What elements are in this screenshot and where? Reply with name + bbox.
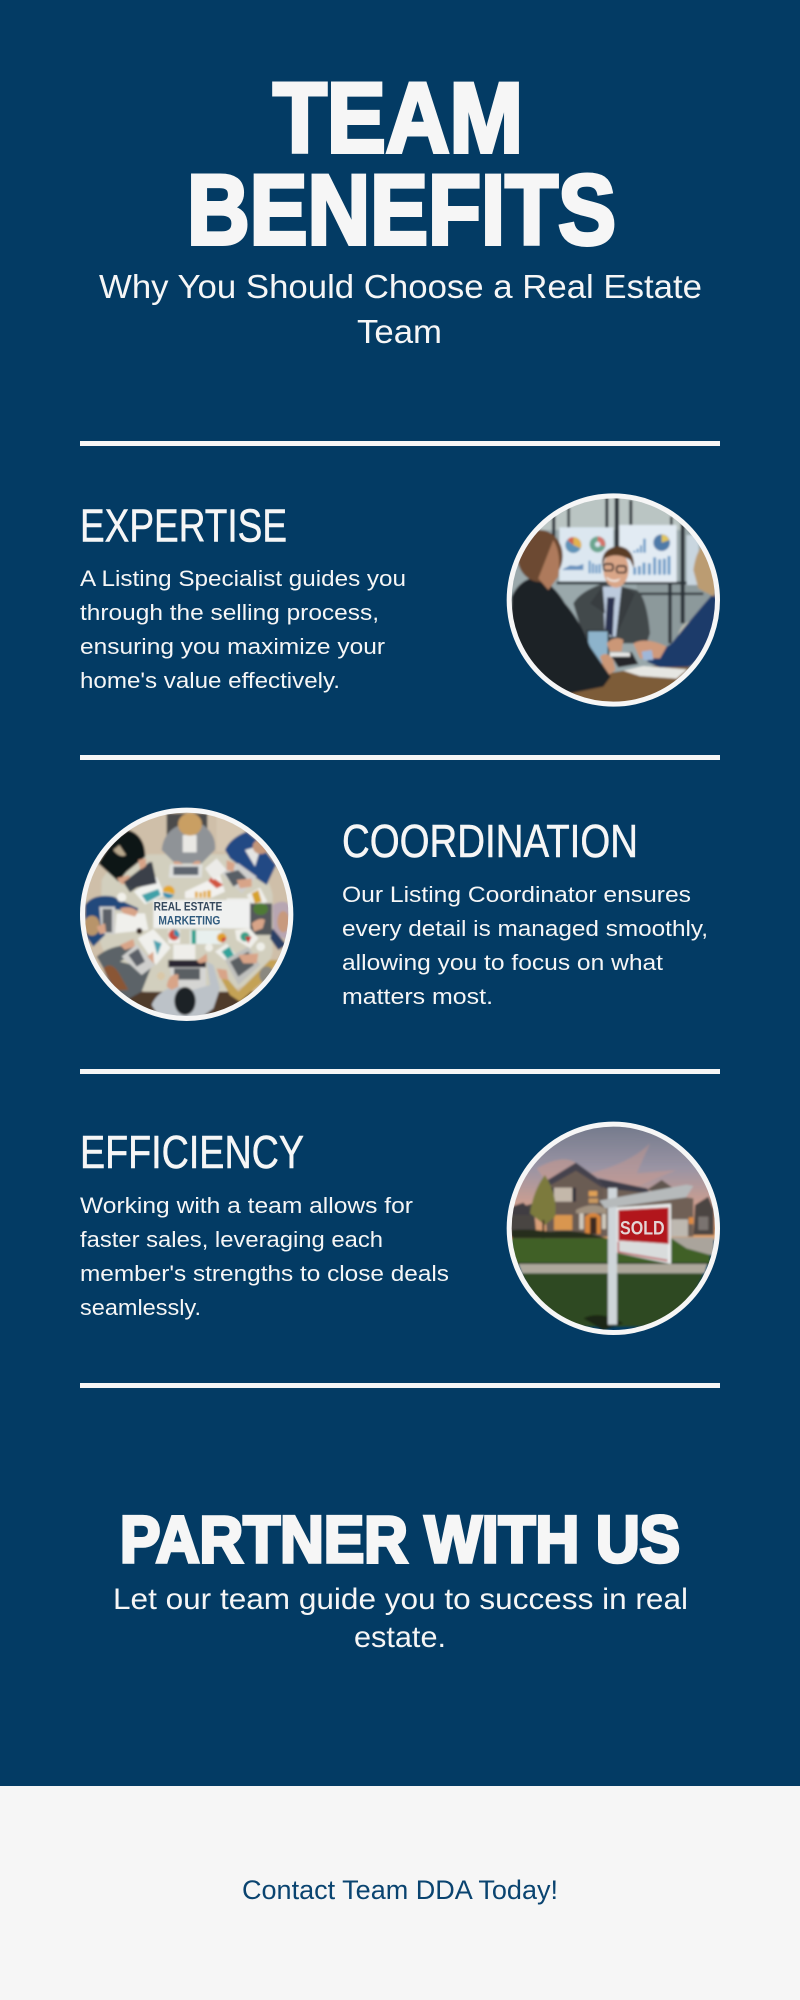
call to action heading: PARTNER WITH US	[120, 1502, 680, 1576]
call to action text: estate.	[354, 1621, 446, 1654]
subtitle: Team	[357, 313, 442, 350]
text: expertise description: ensuring you maximize your	[80, 634, 385, 659]
text: coordination description: Our Listing Coordinator ensures	[342, 882, 691, 907]
photo label: REAL ESTATE	[154, 900, 223, 913]
text: expertise description: A Listing Specialist guides you	[80, 566, 406, 591]
panel: expertise	[80, 490, 723, 710]
text: expertise description: home's value effectively.	[80, 668, 340, 693]
text: efficiency description: member's strengths to close deals	[80, 1261, 449, 1286]
heading: coordination: COORDINATION	[342, 815, 638, 867]
photo: sold sign and house	[503, 1120, 723, 1332]
heading: expertise: EXPERTISE	[80, 500, 287, 552]
call to action text	[113, 1583, 688, 1654]
footer band	[0, 1786, 800, 2000]
subtitle	[99, 268, 702, 350]
footer contact line: Contact Team DDA Today!	[242, 1875, 558, 1905]
text: efficiency description	[80, 1193, 449, 1320]
panel: coordination	[80, 808, 708, 1022]
text: expertise description: through the selling process,	[80, 600, 379, 625]
call to action text: Let our team guide you to success in real	[113, 1583, 688, 1616]
text: coordination description	[342, 882, 708, 1009]
photo: business meeting	[503, 490, 723, 710]
text: efficiency description: seamlessly.	[80, 1295, 201, 1320]
text: coordination description: every detail is managed smoothly,	[342, 916, 708, 941]
text: efficiency description: faster sales, leveraging each	[80, 1227, 383, 1252]
photo label	[154, 902, 222, 924]
text: expertise description	[80, 566, 406, 693]
text: coordination description: matters most.	[342, 984, 493, 1009]
text: efficiency description: Working with a team allows for	[80, 1193, 413, 1218]
title: BENEFITS	[187, 154, 616, 265]
title: TEAM	[273, 62, 523, 173]
text: coordination description: allowing you to focus on what	[342, 950, 663, 975]
subtitle: Why You Should Choose a Real Estate	[99, 268, 702, 305]
sign label: SOLD	[620, 1219, 665, 1240]
photo label: MARKETING	[158, 915, 220, 928]
title	[187, 62, 616, 265]
photo: team around table	[80, 808, 293, 1022]
heading: efficiency: EFFICIENCY	[80, 1126, 304, 1178]
panel: efficiency	[80, 1120, 723, 1332]
